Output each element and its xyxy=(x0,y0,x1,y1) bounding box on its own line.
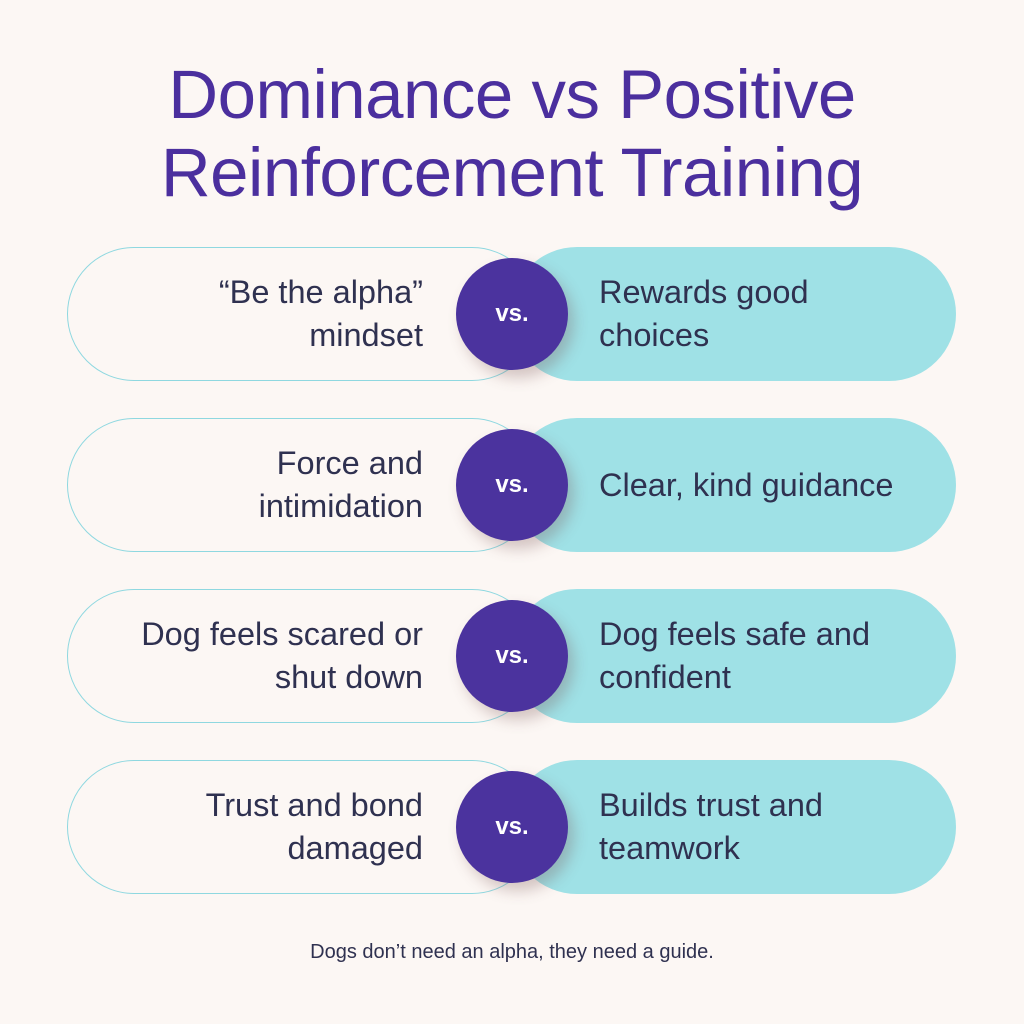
left text: Force and xyxy=(277,445,423,481)
vs circle xyxy=(456,258,568,370)
right text xyxy=(599,787,823,866)
left pill xyxy=(67,418,539,552)
vs circle: vs. xyxy=(495,813,529,840)
left text: Trust and bond xyxy=(206,787,423,823)
right text: confident xyxy=(599,659,731,695)
left pill xyxy=(67,589,539,723)
left text: mindset xyxy=(309,317,423,353)
right pill xyxy=(510,418,956,552)
right text: Rewards good xyxy=(599,274,809,310)
right text: Builds trust and xyxy=(599,787,823,823)
right text: teamwork xyxy=(599,830,740,866)
title: Reinforcement Training xyxy=(161,134,863,211)
right pill xyxy=(510,589,956,723)
row 2 xyxy=(67,418,956,556)
left pill xyxy=(67,760,539,894)
left text xyxy=(141,616,423,695)
left text: “Be the alpha” xyxy=(219,274,423,310)
right pill xyxy=(510,247,956,381)
footer: Dogs don’t need an alpha, they need a guide. xyxy=(310,941,714,963)
vs circle xyxy=(456,429,568,541)
left text: intimidation xyxy=(259,488,423,524)
right text xyxy=(599,616,870,695)
row 1 xyxy=(67,247,956,384)
left pill xyxy=(67,247,539,381)
vs circle: vs. xyxy=(495,471,529,498)
left text xyxy=(206,787,423,866)
left text: Dog feels scared or xyxy=(141,616,423,652)
right text: choices xyxy=(599,317,709,353)
right pill xyxy=(510,760,956,894)
left text: damaged xyxy=(287,830,423,866)
left text xyxy=(259,445,423,524)
right text xyxy=(599,274,809,353)
left text: shut down xyxy=(275,659,423,695)
vs circle xyxy=(456,771,568,883)
vs circle: vs. xyxy=(495,300,529,327)
title xyxy=(161,56,863,211)
title: Dominance vs Positive xyxy=(168,56,856,133)
vs circle xyxy=(456,600,568,712)
right text: Dog feels safe and xyxy=(599,616,870,652)
left text xyxy=(219,274,423,353)
right text: Clear, kind guidance xyxy=(599,466,894,502)
row 3 xyxy=(67,589,956,726)
row 4 xyxy=(67,760,956,898)
vs circle: vs. xyxy=(495,642,529,669)
